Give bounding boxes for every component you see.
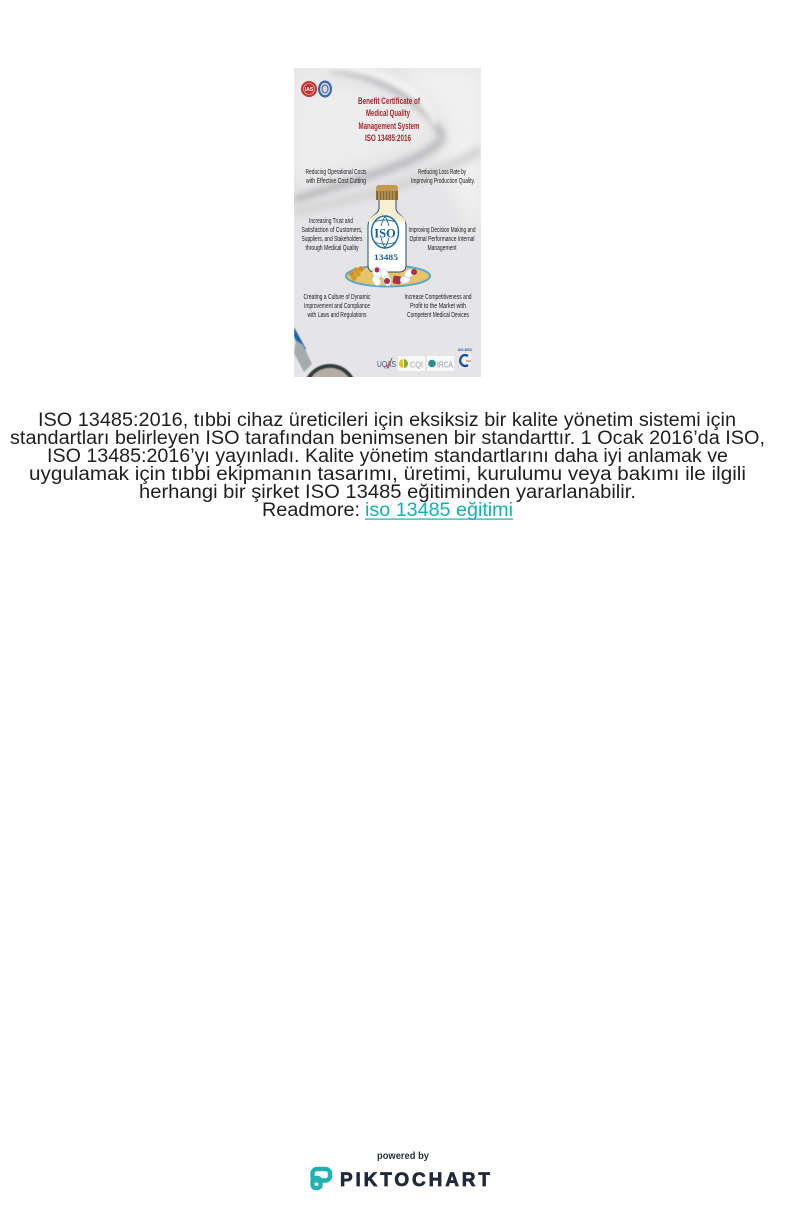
poster title: Management System bbox=[358, 121, 420, 131]
benefit: culture of improvement bbox=[304, 294, 371, 319]
description paragraph: standartları belirleyen ISO tarafından benimsenen bir standarttır. 1 Ocak 2016’da ISO, bbox=[10, 428, 765, 449]
powered by label: powered by bbox=[377, 1151, 429, 1162]
benefit: decision making: Improving Decision Making and bbox=[408, 227, 476, 234]
description paragraph bbox=[10, 410, 765, 521]
accreditation logos bbox=[377, 348, 473, 371]
benefit: competitiveness bbox=[404, 294, 472, 319]
accreditation logos: UQAS bbox=[377, 359, 396, 369]
benefit: trust and satisfaction: Satisfaction of Customers, bbox=[302, 227, 363, 234]
accreditation logos: IRCA bbox=[437, 360, 454, 370]
benefit: culture of improvement: Improvement and Compliance bbox=[304, 303, 370, 310]
icon: medicine bottle with pills: ISO bbox=[374, 226, 396, 240]
benefit: operational costs: with Effective Cost Cutting bbox=[305, 178, 366, 185]
poster title bbox=[358, 96, 421, 143]
link: iso 13485 eğitimi: iso 13485 eğitimi bbox=[365, 500, 513, 521]
benefit: culture of improvement: Creating a Culture of Dynamic bbox=[304, 294, 371, 301]
icon: medicine bottle with pills: 13485 bbox=[374, 252, 398, 262]
logo: IAS seal: IAS bbox=[305, 87, 314, 93]
stethoscope lens bbox=[306, 363, 354, 377]
poster: ISO 13485 benefits bbox=[294, 68, 481, 377]
benefit: decision making: Optimal Performance Internal bbox=[410, 236, 475, 243]
benefit: trust and satisfaction: Suppliers, and Stakeholders bbox=[302, 236, 363, 243]
benefit: trust and satisfaction: Increasing Trust and bbox=[309, 218, 353, 225]
benefit: decision making: Management bbox=[428, 245, 457, 252]
poster title: Medical Quality bbox=[366, 108, 410, 118]
poster title: Benefit Certificate of bbox=[358, 96, 421, 106]
benefit: competitiveness: Competent Medical Devices bbox=[407, 312, 469, 319]
benefit: competitiveness: Increase Competitiveness and bbox=[404, 294, 472, 301]
logo: IAS seal bbox=[301, 81, 317, 97]
icon: Piktochart logo mark bbox=[312, 1169, 330, 1188]
benefit: culture of improvement: with Laws and Regulations bbox=[307, 312, 367, 319]
benefit: trust and satisfaction bbox=[302, 218, 363, 252]
benefit: loss rate bbox=[411, 169, 475, 185]
benefit: trust and satisfaction: through Medical Quality bbox=[306, 245, 359, 252]
benefit: loss rate: Improving Production Quality. bbox=[411, 178, 475, 185]
wordmark: PIKTOCHART bbox=[340, 1170, 490, 1191]
accreditation logos: CQI bbox=[410, 360, 423, 370]
benefit: loss rate: Reducing Loss Rate by bbox=[418, 169, 466, 176]
footer: powered by Piktochart bbox=[312, 1151, 490, 1191]
benefit: decision making bbox=[408, 227, 476, 252]
benefit: operational costs bbox=[305, 169, 367, 185]
description paragraph: Readmore: bbox=[262, 500, 360, 521]
description paragraph: herhangi bir şirket ISO 13485 eğitiminden yararlanabilir. bbox=[139, 482, 636, 503]
logo: accreditation seal bbox=[318, 80, 332, 98]
benefit: operational costs: Reducing Operational Costs bbox=[306, 169, 367, 176]
description paragraph: uygulamak için tıbbi ekipmanın tasarımı, üretimi, kurulumu veya bakımı ile ilgili bbox=[29, 464, 746, 485]
poster title: ISO 13485:2016 bbox=[365, 133, 411, 143]
benefit: competitiveness: Profit to the Market with bbox=[410, 303, 466, 310]
description paragraph: ISO 13485:2016, tıbbi cihaz üreticileri için eksiksiz bir kalite yönetim sistemi için bbox=[38, 410, 736, 431]
stethoscope tube bbox=[294, 327, 306, 352]
description paragraph: ISO 13485:2016’yı yayınladı. Kalite yönetim standartlarını daha iyi anlamak ve bbox=[47, 446, 728, 467]
accreditation logos: IAS-MSC bbox=[458, 348, 473, 352]
icon: medicine bottle with pills bbox=[346, 185, 430, 287]
